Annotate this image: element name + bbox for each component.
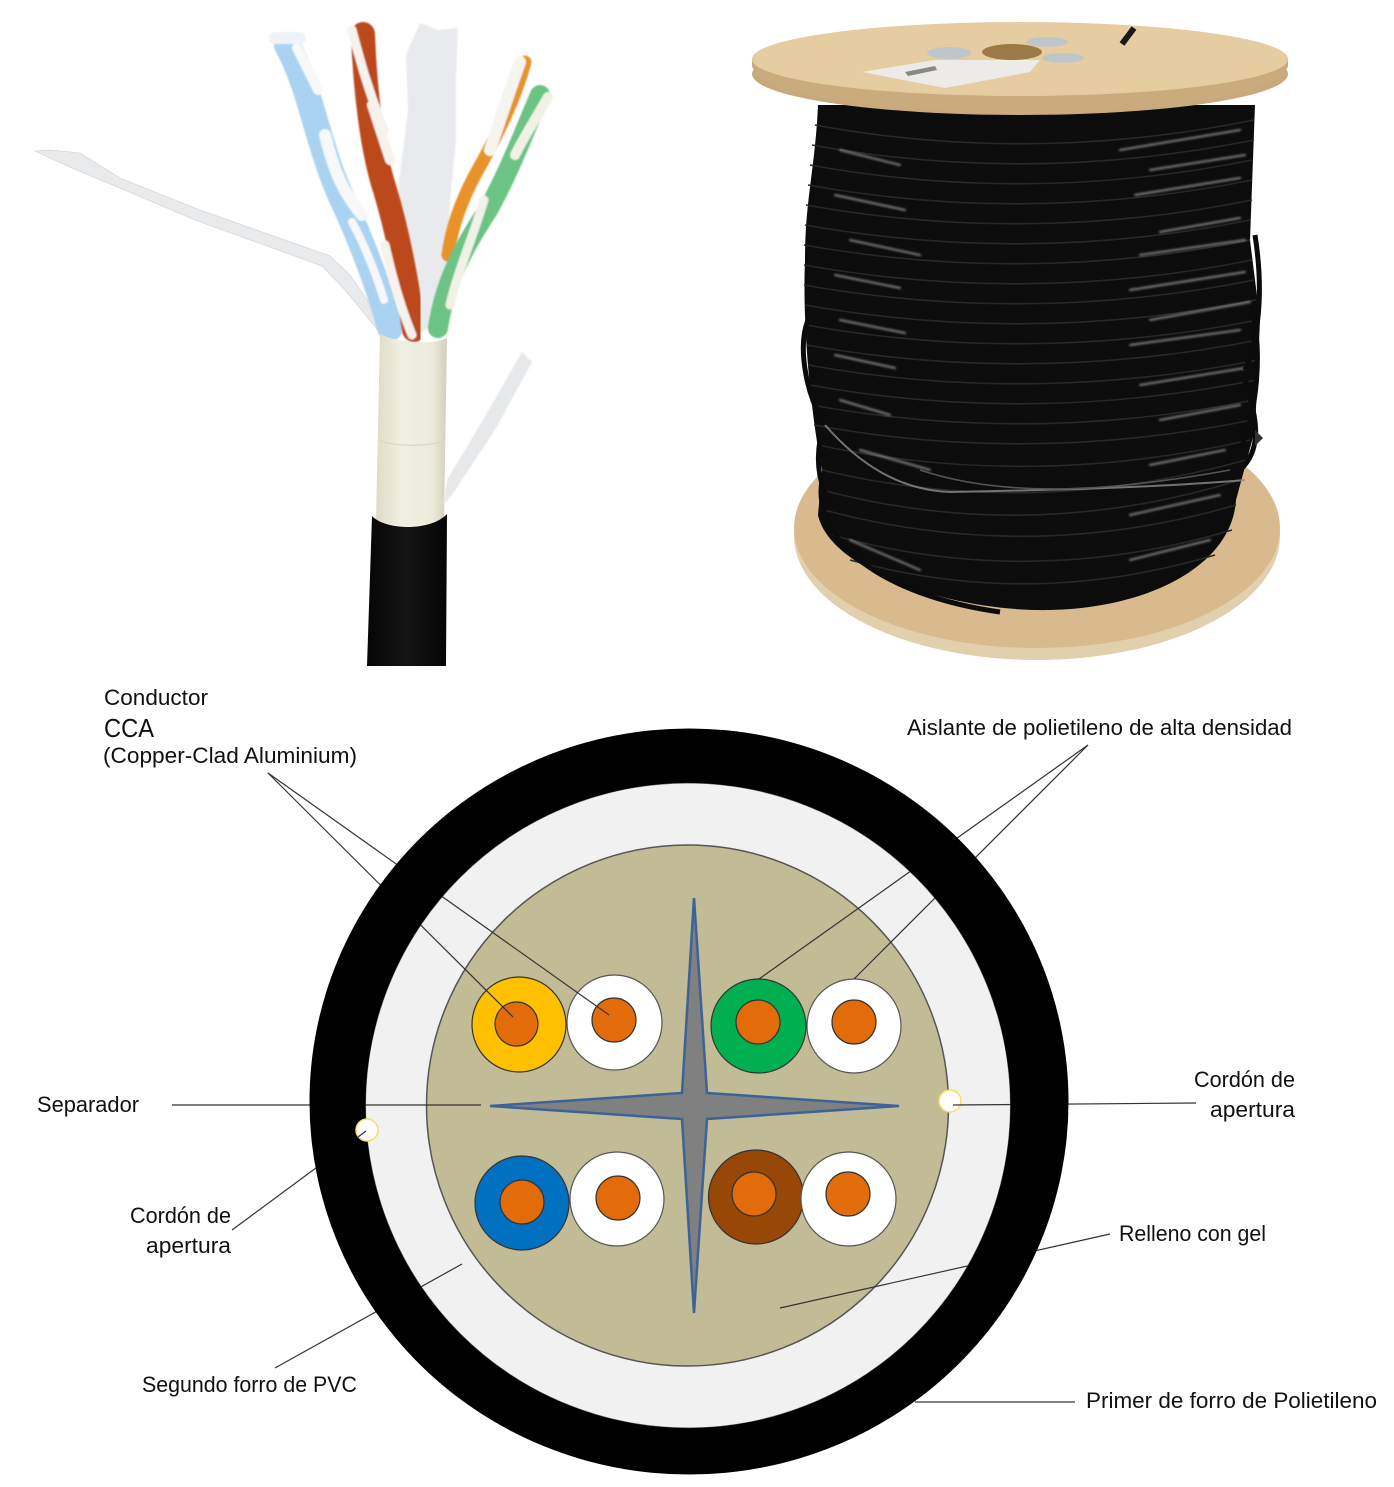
loose loops [803, 235, 1259, 612]
label: conductor CCA [103, 685, 357, 768]
label: rip cord left: apertura [146, 1233, 232, 1258]
label: rip cord left [130, 1203, 232, 1258]
photo: stripped cable [35, 23, 548, 666]
centre hole [982, 44, 1042, 60]
label: conductor CCA: Conductor [104, 685, 208, 710]
bottom flange [794, 408, 1280, 660]
cross-section diagram [172, 729, 1196, 1475]
rip cord strip [443, 352, 532, 505]
wire coil [803, 105, 1263, 612]
label: gel: Relleno con gel [1119, 1221, 1266, 1246]
barcode sticker [862, 60, 1040, 88]
top flange [752, 22, 1288, 115]
clear separator strand [398, 23, 458, 335]
orange pair [448, 62, 525, 255]
tape strand [35, 150, 386, 330]
crossing strands [825, 425, 1245, 492]
label: conductor CCA: (Copper-Clad Aluminium) [103, 743, 357, 768]
rip cord right [939, 1090, 961, 1112]
pair: green [711, 979, 901, 1073]
label: PVC: Segundo forro de PVC [142, 1372, 357, 1397]
outer polyethylene jacket [310, 729, 1068, 1475]
label: rip cord left: Cordón de [130, 1203, 231, 1228]
black outer sheath [367, 514, 447, 666]
label: polyethylene: Primer de forro de Polietileno [1086, 1388, 1377, 1413]
pair: orange [472, 975, 662, 1072]
pair: brown [708, 1150, 896, 1246]
label: rip cord right: Cordón de [1194, 1067, 1295, 1092]
label: conductor CCA: CCA [104, 713, 155, 743]
brown pair [352, 30, 414, 335]
cross separator [490, 898, 899, 1313]
pair: blue [475, 1152, 664, 1250]
label: insulation: Aislante de polietileno de alta densidad [907, 715, 1292, 740]
rip cord left [356, 1119, 378, 1141]
blue pair [275, 38, 390, 328]
green pair [438, 95, 548, 328]
leader lines [172, 745, 1196, 1402]
PVC second jacket [366, 783, 1010, 1428]
label: rip cord right [1194, 1067, 1296, 1122]
label: separator: Separador [37, 1092, 139, 1117]
photo: cable spool [752, 22, 1288, 660]
washers [927, 47, 971, 59]
label: rip cord right: apertura [1210, 1097, 1296, 1122]
inner sheath tube [376, 334, 447, 527]
gel filling [426, 845, 948, 1366]
cable end [1122, 28, 1134, 44]
